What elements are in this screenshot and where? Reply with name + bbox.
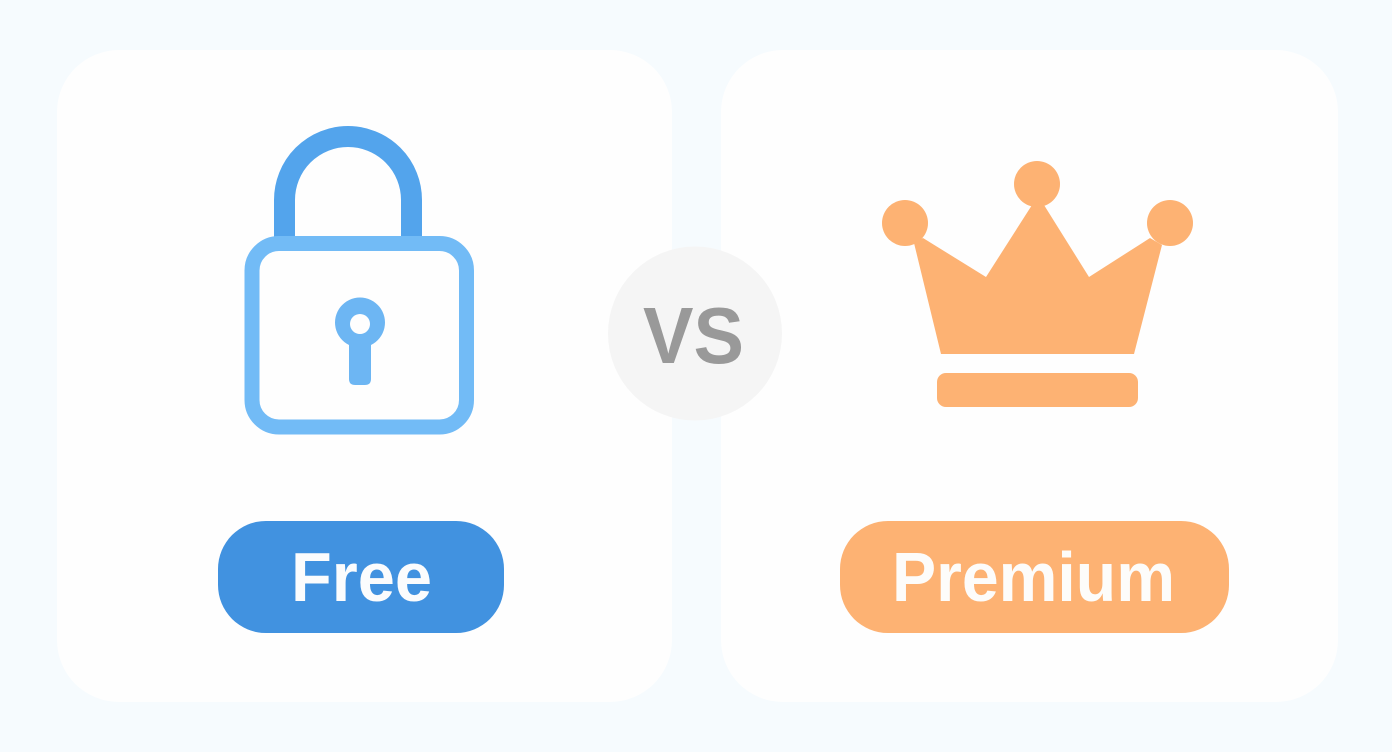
padlock body bbox=[252, 244, 466, 427]
padlock shackle bbox=[284, 136, 412, 238]
panel: free bbox=[57, 50, 672, 702]
badge: free: Free bbox=[291, 538, 432, 616]
vs badge bbox=[608, 246, 782, 420]
badge: premium bbox=[840, 521, 1229, 633]
crown right jewel bbox=[1147, 200, 1193, 246]
badge: premium: Premium bbox=[892, 538, 1175, 616]
icon: padlock bbox=[252, 136, 466, 427]
crown body bbox=[914, 205, 1162, 354]
icon: crown bbox=[882, 161, 1193, 407]
crown base bar bbox=[937, 373, 1138, 407]
keyhole bbox=[335, 298, 385, 385]
crown centre jewel bbox=[1014, 161, 1060, 207]
badge: free bbox=[218, 521, 504, 633]
crown left jewel bbox=[882, 200, 928, 246]
vs badge: VS bbox=[643, 291, 744, 380]
panel: premium bbox=[721, 50, 1338, 702]
